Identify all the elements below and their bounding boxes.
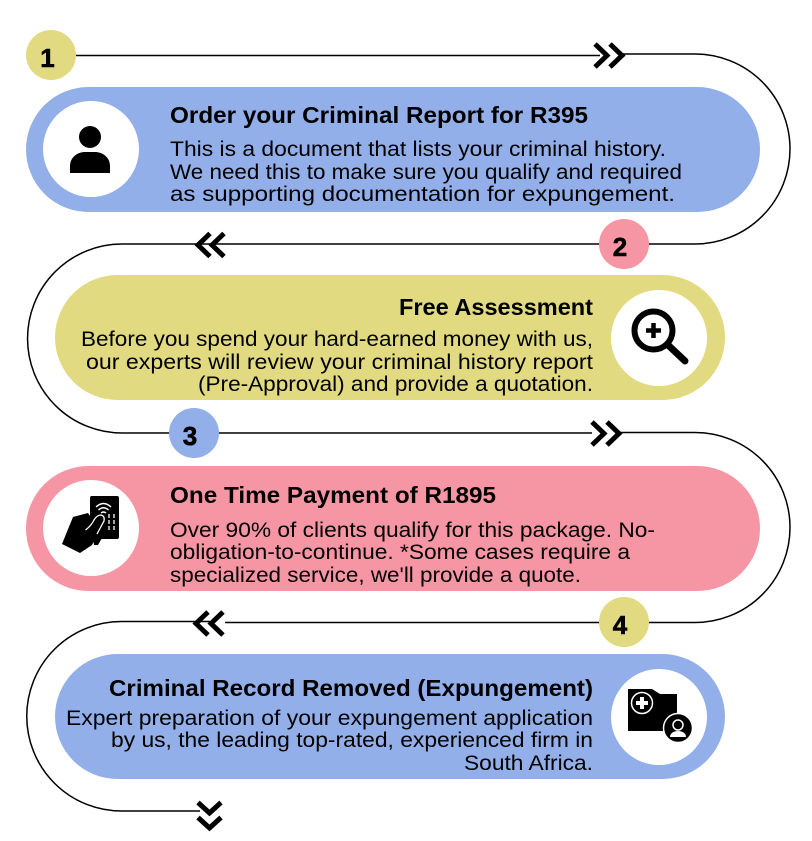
- arrow: right, row 1: [595, 44, 622, 67]
- arrow: left, row 4: [196, 612, 223, 635]
- badge: 2: 2: [613, 232, 627, 262]
- badge: 4: 4: [613, 610, 628, 640]
- heading: step 3: One Time Payment of R1895: [170, 482, 496, 508]
- icon: card payment: [43, 480, 139, 576]
- text block: step 1: as supporting documentation for expungement.: [170, 182, 675, 206]
- text block: step 4: South Africa.: [464, 751, 593, 775]
- text block: step 3: obligation-to-continue. *Some cases require a: [170, 540, 630, 564]
- heading: step 2: Free Assessment: [399, 294, 593, 320]
- text block: step 1: We need this to make sure you qualify and required: [170, 160, 682, 184]
- icon: magnifier: [611, 290, 707, 386]
- badge: 2: [599, 219, 649, 269]
- text block: step 3: Over 90% of clients qualify for this package. No-: [170, 518, 655, 542]
- text block: step 4: [66, 706, 593, 775]
- panel: step 2: [55, 275, 725, 400]
- text block: step 2: [81, 327, 593, 396]
- text block: step 4: Expert preparation of your expungement application: [66, 706, 593, 730]
- badge: 1: 1: [40, 43, 55, 73]
- icon: person: [43, 101, 139, 197]
- badge: 4: [599, 597, 649, 647]
- panel: step 3: [26, 466, 760, 591]
- badge: 3: 3: [183, 421, 197, 451]
- text block: step 2: Before you spend your hard-earned money with us,: [81, 327, 593, 351]
- panel: step 4: [55, 654, 725, 779]
- text block: step 1: This is a document that lists your criminal history.: [170, 137, 666, 161]
- text block: step 1: [170, 137, 682, 206]
- text block: step 2: our experts will review your criminal history report: [86, 350, 593, 374]
- text block: step 2: (Pre-Approval) and provide a quotation.: [198, 372, 593, 396]
- text block: step 4: by us, the leading top-rated, experienced firm in: [111, 728, 593, 752]
- text block: step 3: [170, 518, 655, 587]
- panel: step 1: [26, 87, 760, 212]
- icon: folder with person: [611, 669, 707, 765]
- badge: 1: [26, 30, 76, 80]
- arrow: right, row 3: [592, 422, 619, 445]
- text block: step 3: specialized service, we'll provide a quote.: [170, 563, 581, 587]
- heading: step 4: Criminal Record Removed (Expungement): [109, 675, 593, 701]
- arrow: left, row 2: [198, 234, 224, 256]
- heading: step 1: Order your Criminal Report for R395: [170, 102, 588, 128]
- badge: 3: [169, 408, 219, 458]
- arrow: down, end: [198, 802, 221, 828]
